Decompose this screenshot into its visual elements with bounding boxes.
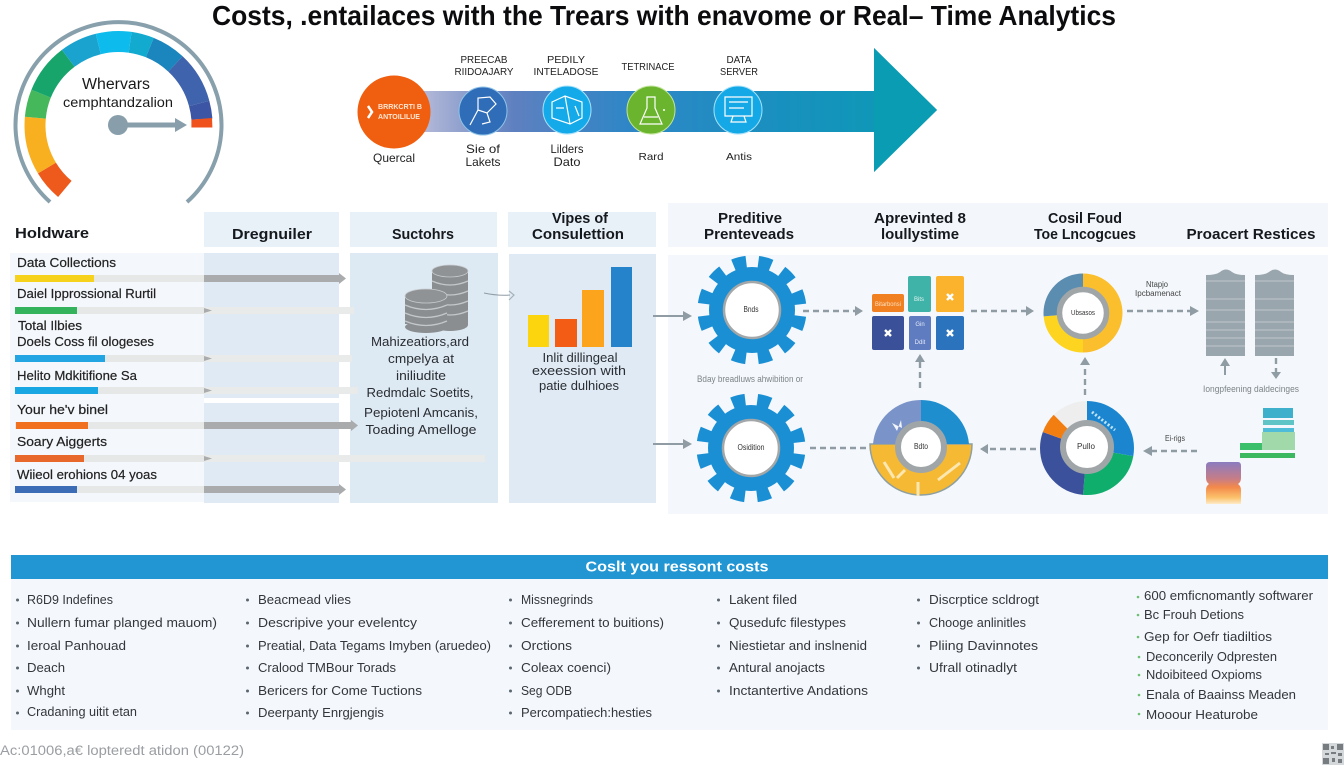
text: suctohrs description [364,334,478,437]
headings: process columns: Prenteveads [704,227,794,243]
list column 4 [717,592,869,698]
step headings [454,55,758,78]
chart: donut top: Ubsasos [1071,308,1095,317]
list column 3: Missnegrinds [521,592,593,607]
text: chart description: Inlit dillingeal [542,350,618,365]
list column 1: Deach [27,660,65,675]
heading: vipes of consulettion: Consulettion [532,227,624,243]
step: lakes [459,87,507,169]
list column 3: Seg ODB [521,683,572,698]
step headings: INTELADOSE [534,67,599,78]
list column 5: Ufrall otinadlyt [929,660,1017,675]
flow arrows [803,306,1199,456]
list column 3 [509,592,664,720]
banner [11,555,1328,579]
chart: pie with yellow base [870,400,972,496]
list column 6: Deconcerily Odpresten [1146,649,1277,664]
panel: holdware table [10,212,485,503]
step: quercal: BRRKCRTI B [378,102,423,111]
list column 2: Deerpanty Enrgjengis [258,705,384,720]
list column 6: Gep for Oefr tiadiltios [1144,629,1273,644]
list column 2 [246,592,491,720]
step headings: SERVER [720,67,758,78]
text: chart description: exeession with [532,363,626,378]
text: suctohrs description: Pepiotenl Amcanis, [364,405,478,420]
row labels [17,255,157,482]
text: suctohrs description: Redmdalc Soetits, [366,385,474,400]
step: data [543,86,591,169]
list column 2: Cralood TMBour Torads [258,660,396,675]
step headings: DATA [726,55,752,66]
panel: process flow [653,203,1328,514]
panel: suctohrs [350,212,514,503]
row labels: Your he'v binel [17,402,108,417]
list column 4: Niestietar and inslnenid [729,638,867,653]
list column 3: Percompatiech:hesties [521,705,652,720]
text: chart description [532,350,626,393]
list column 1 [16,592,217,719]
text: suctohrs description: Mahizeatiors,ard [371,334,469,349]
icon: database stacks [405,265,468,333]
gauge colour band [25,31,212,197]
icon: qr code [1322,743,1344,765]
label: rack note [1135,280,1182,298]
step: data: Dato [554,155,581,169]
row labels: Total Ilbies [18,318,83,333]
icon: tile grid: Ddit [915,340,926,346]
step headings: RIIDOAJARY [454,67,514,78]
icon: gear bottom: Osidition [738,443,764,452]
list column 2: Preatial, Data Tegams Imyben (aruedeo) [258,638,491,653]
list column 6: Ndoibiteed Oxpioms [1146,667,1262,682]
gauge label: Whervars [82,76,150,93]
icon: tile grid: Gin [915,322,925,328]
chart: donut top [1051,281,1115,345]
step: server: Antis [726,151,752,163]
title: Costs, .entailaces with the Trears with enavome or Real– Time Analytics [212,0,1116,31]
list column 1: Ieroal Panhouad [27,638,126,653]
headings: process columns: Cosil Foud [1048,211,1122,227]
step: lakes: Lakets [466,155,500,169]
list column 5 [917,592,1039,675]
arrows: rack up and down [1220,358,1281,379]
list column 5: Pliing Davinnotes [929,638,1039,653]
label column background [10,253,204,502]
gauge outer arc [15,22,221,202]
headings: process columns: Preditive [718,211,782,227]
list column 6 [1137,588,1314,722]
text: suctohrs description: iniliudite [396,368,446,383]
row labels: Soary Aiggerts [17,434,108,449]
row labels: Helito Mdkitifione Sa [17,368,138,383]
list column 4: Lakent filed [729,592,797,607]
label: rack note: Ntapjo [1146,280,1169,289]
step: data: Lilders [550,142,584,156]
chart: donut bottom: Pullo [1077,442,1096,451]
icon: tile grid: Bits [914,297,924,303]
icon: tile grid [872,276,964,350]
panel: costs list [11,555,1328,730]
headings: process columns: loullystime [881,227,959,243]
list column 3: Orctions [521,638,573,653]
list column 5: Chooge anlinitles [929,615,1026,630]
step headings: PEDILY [547,55,585,66]
list column 5: Discrptice scldrogt [929,592,1039,607]
heading: vipes of consulettion [532,211,624,243]
banner: Coslt you ressont costs [586,560,768,576]
headings: process columns: Proacert Restices [1186,227,1316,243]
list column 6: Mooour Heaturobe [1146,707,1258,722]
caption: racks: Iongpfeening daldecinges [1203,384,1299,394]
row labels: Daiel Ipprossional Rurtil [17,286,156,301]
icon: gradient cylinder [1206,462,1241,504]
step: flask: Rard [638,151,664,163]
headings: process columns: Aprevinted 8 [874,211,966,227]
step: quercal: Quercal [373,151,415,165]
chart: pie with yellow base: Bdto [914,442,928,451]
list column 2: Bericers for Come Tuctions [258,683,423,698]
list column 2: Beacmead vlies [258,592,351,607]
icon: server racks [1206,270,1294,356]
list column 4: Inctantertive Andations [729,683,869,698]
text: chart description: patie dulhioes [539,378,619,393]
heading: vipes of consulettion: Vipes of [552,211,608,227]
text: suctohrs description: cmpelya at [388,351,454,366]
list column 3: Coleax coenci) [521,660,611,675]
step: flask [627,86,675,163]
list column 6: Bc Frouh Detions [1144,607,1244,622]
list column 1: Whght [27,683,65,698]
footer note: Ac:01006,a€ lopteredt atidon (00122) [0,743,244,758]
row bars [15,273,485,495]
row labels: Wiieol erohions 04 yoas [17,467,157,482]
list column 6: 600 emficnomantly softwarer [1144,588,1314,603]
list column 2: Descripive your evelentcy [258,615,418,630]
step headings: PREECAB [460,55,508,66]
gauge label [63,76,173,110]
list column 1: Cradaning uitit etan [27,704,137,719]
arrow body [420,48,937,172]
panel: vipes of consulettion [508,211,656,503]
step: server [714,86,762,163]
list column 1: Nullern fumar planged mauom) [27,615,217,630]
caption: gear: Bday breadluws ahwibition or [697,374,803,384]
gauge [15,22,221,202]
label: rack note: Ipcbamenact [1135,289,1182,298]
label: stack arrow: Ei-rigs [1165,434,1185,443]
list column 6: Enala of Baainss Meaden [1146,687,1296,702]
pipeline arrow [358,48,937,172]
icon: gear bottom [703,400,799,496]
arrows into process panel [653,311,692,449]
list column 4: Qusedufc filestypes [729,615,847,630]
gauge label: cemphtandzalion [63,94,173,110]
headings: process columns: Toe Lncogcues [1034,227,1136,243]
icon: gear top [704,262,800,358]
icon: tile grid: Bitarbonsi [875,302,901,308]
column: dregnuiler [204,212,339,503]
list column 3: Cefferement to buitions) [521,615,664,630]
headings: process columns [704,211,1316,243]
chart: donut bottom [1051,412,1123,484]
header: holdware: Holdware [15,225,89,242]
icon: gear top: Bnds [744,305,758,314]
icon: coloured stack [1240,408,1295,458]
step: quercal: ANTOILILUE [378,112,420,121]
text: suctohrs description: Toading Amelloge [366,422,476,437]
heading: suctohrs: Suctohrs [392,227,454,243]
step: lakes: Sie of [466,142,501,156]
step headings: TETRINACE [622,62,675,73]
arrow: small link [484,291,514,300]
column: dregnuiler: Dregnuiler [232,227,312,243]
gauge needle [108,115,187,135]
row labels: Data Collections [17,255,117,270]
row labels: Doels Coss fil ologeses [17,334,154,349]
step: quercal [358,76,430,165]
list column 4: Antural anojacts [729,660,826,675]
arrow head [874,48,937,172]
bar chart [528,267,632,347]
list column 1: R6D9 Indefines [27,592,113,607]
